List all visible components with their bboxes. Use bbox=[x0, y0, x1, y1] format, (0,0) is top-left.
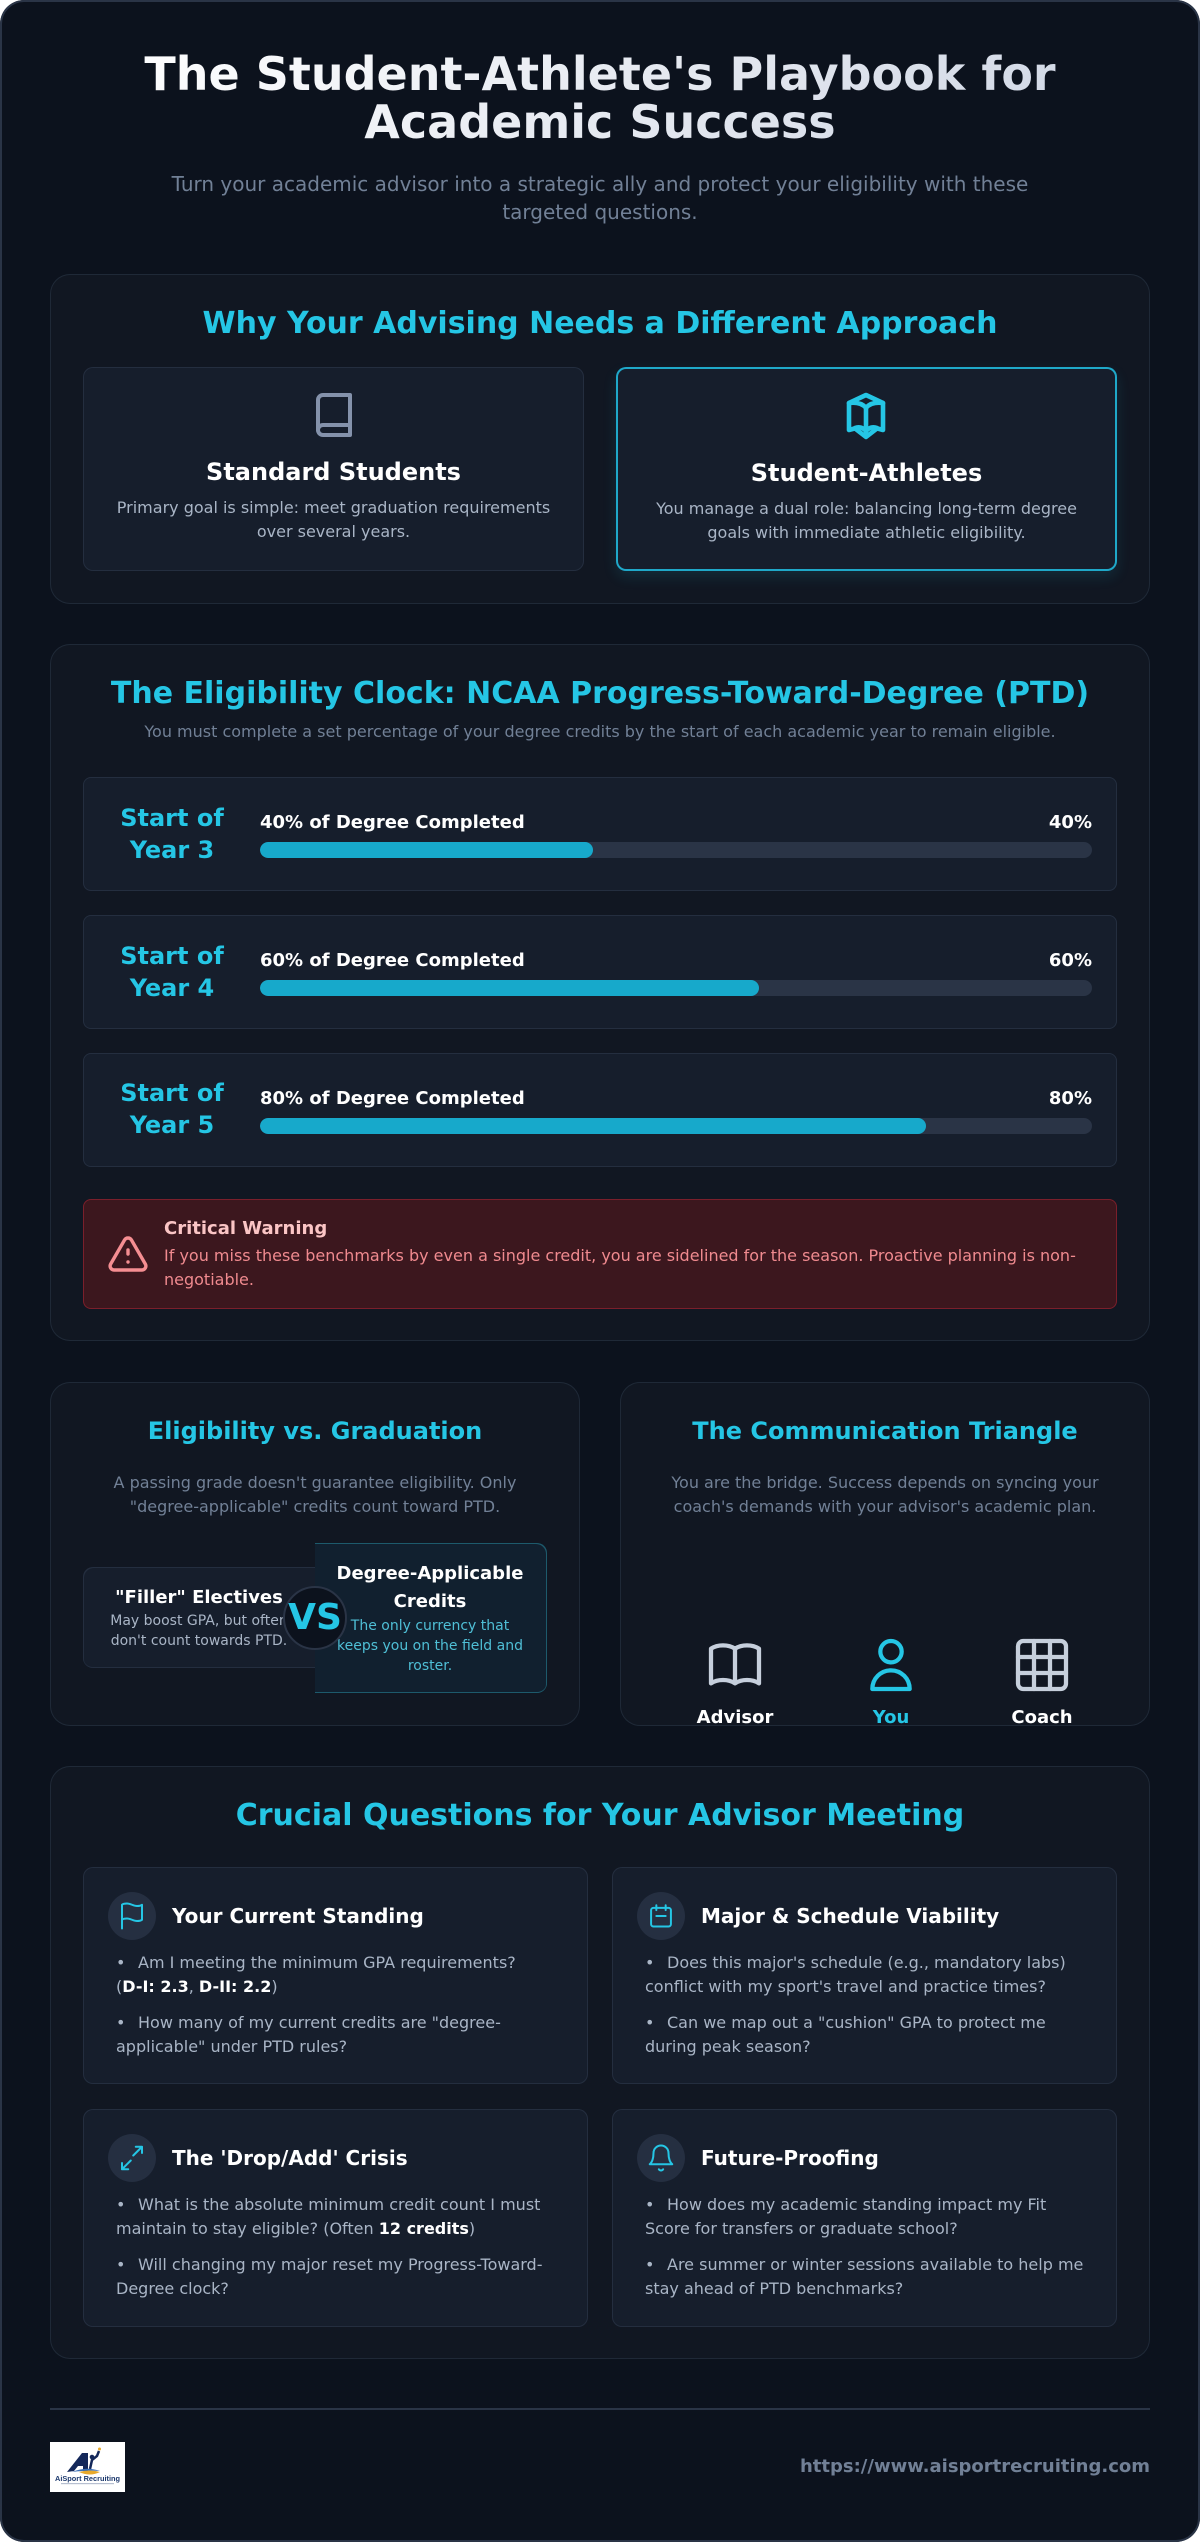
bar: 60 percent bbox=[260, 980, 1092, 996]
icon: book bbox=[316, 393, 352, 437]
text: student-athletes description: You manage a dual role: balancing long-term degree bbox=[656, 499, 1077, 518]
heading: degree-applicable credits: Credits bbox=[394, 1591, 466, 1612]
text: standard students description: Primary goal is simple: meet graduation requirements bbox=[117, 498, 550, 517]
question: summer or winter sessions bbox=[645, 2255, 1083, 2298]
icon: shield book bbox=[846, 392, 886, 440]
title: The Student-Athlete's Playbook for bbox=[144, 47, 1056, 101]
label: coach: Coach bbox=[1011, 1707, 1073, 1728]
text: critical warning body: If you miss these benchmarks by even a single credit, you are sidelined for the season. Proactive planning is non- bbox=[164, 1246, 1076, 1265]
text: standard students description bbox=[117, 498, 550, 541]
question: degree-applicable credits: How many of my current credits are "degree- bbox=[138, 2013, 501, 2032]
heading: eligibility clock: The Eligibility Clock: NCAA Progress-Toward-Degree (PTD) bbox=[111, 676, 1089, 711]
question: schedule conflict: Does this major's schedule (e.g., mandatory labs) bbox=[667, 1953, 1066, 1972]
label: start of year 5: Year 5 bbox=[130, 1111, 214, 1139]
label: 40 percent completed: 40% bbox=[1049, 812, 1092, 833]
icon: coach grid bbox=[1016, 1638, 1068, 1692]
text: degree-applicable description: The only currency that bbox=[351, 1618, 509, 1634]
label: start of year 3: Year 3 bbox=[130, 836, 214, 864]
label: start of year 4: Year 4 bbox=[130, 974, 214, 1002]
label: start of year 5 bbox=[120, 1079, 224, 1139]
icon: flag bbox=[108, 1892, 156, 1940]
heading: communication triangle: The Communication Triangle bbox=[692, 1417, 1078, 1445]
label: 80 percent completed bbox=[260, 1088, 1092, 1109]
label: 60 percent completed: 60% of Degree Completed bbox=[260, 950, 525, 971]
heading: the drop/add crisis: The 'Drop/Add' Crisis bbox=[172, 2146, 408, 2170]
label: 40 percent completed: 40% of Degree Completed bbox=[260, 812, 525, 833]
question: minimum credit count: • bbox=[116, 2195, 125, 2214]
label: 80 percent completed: 80% of Degree Completed bbox=[260, 1088, 525, 1109]
card: future-proofing bbox=[612, 2109, 1117, 2327]
question: degree-applicable credits: applicable" under PTD rules? bbox=[116, 2037, 347, 2056]
heading: student-athletes: Student-Athletes bbox=[751, 459, 982, 487]
text: student-athletes description: goals with immediate athletic eligibility. bbox=[707, 523, 1026, 542]
comparison box: degree-applicable credits bbox=[315, 1543, 547, 1693]
text: eligibility vs graduation intro bbox=[114, 1473, 516, 1516]
title bbox=[100, 50, 1100, 146]
panel: crucial questions bbox=[50, 1766, 1150, 2359]
panel: eligibility vs graduation bbox=[50, 1382, 580, 1726]
heading: future-proofing: Future-Proofing bbox=[701, 2146, 879, 2170]
label: start of year 5: Start of bbox=[120, 1079, 224, 1107]
text: communication triangle intro: You are the bridge. Success depends on syncing your bbox=[671, 1473, 1099, 1492]
question: fit score: • bbox=[645, 2195, 654, 2214]
text: communication triangle intro bbox=[671, 1473, 1099, 1516]
heading: degree-applicable credits bbox=[337, 1563, 523, 1612]
text: critical warning body: negotiable. bbox=[164, 1270, 254, 1289]
panel: the communication triangle bbox=[620, 1382, 1150, 1726]
text: degree-applicable description bbox=[337, 1618, 523, 1674]
question: gpa requirements bbox=[116, 1953, 516, 1996]
logo: aisport recruiting bbox=[50, 2442, 125, 2492]
question: cushion gpa bbox=[645, 2013, 1046, 2056]
question: degree-applicable credits: • bbox=[116, 2013, 125, 2032]
badge: vs: VS bbox=[288, 1597, 342, 1638]
question: minimum credit count: maintain to stay eligible? (Often 12 credits) bbox=[116, 2219, 475, 2238]
label: 80 percent completed: 80% bbox=[1049, 1088, 1092, 1109]
card: major and schedule viability bbox=[612, 1867, 1117, 2084]
heading: different approach: Why Your Advising Needs a Different Approach bbox=[203, 306, 997, 341]
question: changing major: Will changing my major reset my Progress-Toward- bbox=[138, 2255, 542, 2274]
progress row: year 4 bbox=[83, 915, 1117, 1029]
icon: you person bbox=[870, 1638, 912, 1692]
icon: advisor open book bbox=[708, 1643, 762, 1686]
progress row: year 5 bbox=[83, 1053, 1117, 1167]
text: filler electives description bbox=[110, 1613, 288, 1649]
heading: critical warning: Critical Warning bbox=[164, 1218, 327, 1239]
text: filler electives description: don't count towards PTD. bbox=[111, 1633, 287, 1649]
question: gpa requirements: • bbox=[116, 1953, 125, 1972]
text: degree-applicable description: keeps you on the field and bbox=[337, 1638, 523, 1654]
text: eligibility vs graduation intro: "degree-applicable" credits count toward PTD. bbox=[130, 1497, 500, 1516]
panel: why your advising needs a different approach bbox=[50, 274, 1150, 604]
text: degree-applicable description: roster. bbox=[408, 1658, 452, 1674]
label: 40 percent completed bbox=[260, 812, 1092, 833]
question: summer or winter sessions: • bbox=[645, 2255, 654, 2274]
panel: the eligibility clock bbox=[50, 644, 1150, 1341]
question: changing major: • bbox=[116, 2255, 125, 2274]
heading: crucial questions: Crucial Questions for Your Advisor Meeting bbox=[236, 1798, 964, 1833]
card: the drop/add crisis bbox=[83, 2109, 588, 2327]
subtitle bbox=[172, 172, 1028, 224]
label: start of year 4 bbox=[120, 942, 224, 1002]
bar: 40 percent bbox=[260, 842, 1092, 858]
question: cushion gpa: • bbox=[645, 2013, 654, 2032]
heading: your current standing: Your Current Standing bbox=[172, 1904, 424, 1928]
icon: bell bbox=[637, 2134, 685, 2182]
bar: 80 percent bbox=[260, 1118, 1092, 1134]
question: schedule conflict: conflict with my sport's travel and practice times? bbox=[645, 1977, 1046, 1996]
label: 60 percent completed: 60% bbox=[1049, 950, 1092, 971]
badge: vs bbox=[283, 1586, 347, 1650]
question: gpa requirements: Am I meeting the minimum GPA requirements? bbox=[138, 1953, 516, 1972]
text: critical warning body bbox=[164, 1246, 1076, 1289]
question: schedule conflict bbox=[645, 1953, 1066, 1996]
heading: degree-applicable credits: Degree-Applicable bbox=[337, 1563, 523, 1584]
question: summer or winter sessions: Are summer or winter sessions available to help me bbox=[667, 2255, 1083, 2274]
question: fit score: How does my academic standing impact my Fit bbox=[667, 2195, 1046, 2214]
label: you: You bbox=[873, 1707, 909, 1728]
question: minimum credit count bbox=[116, 2195, 540, 2238]
label: advisor: Advisor bbox=[697, 1707, 773, 1728]
icon: diagonal arrows bbox=[108, 2134, 156, 2182]
text: communication triangle intro: coach's demands with your advisor's academic plan. bbox=[674, 1497, 1096, 1516]
text: student-athletes description bbox=[656, 499, 1077, 542]
callout: critical warning bbox=[83, 1199, 1117, 1309]
text: eligibility vs graduation intro: A passing grade doesn't guarantee eligibility. Only bbox=[114, 1473, 516, 1492]
card: student-athletes bbox=[616, 367, 1117, 571]
progress row: year 3 bbox=[83, 777, 1117, 891]
comparison box: filler electives bbox=[83, 1567, 315, 1668]
question: gpa requirements: (D-I: 2.3, D-II: 2.2) bbox=[116, 1977, 278, 1996]
question: cushion gpa: during peak season? bbox=[645, 2037, 811, 2056]
question: changing major: Degree clock? bbox=[116, 2279, 229, 2298]
logo: aisport recruiting: AiSport Recruiting bbox=[55, 2476, 120, 2483]
question: degree-applicable credits bbox=[116, 2013, 501, 2056]
subtitle: Turn your academic advisor into a strategic ally and protect your eligibility with these bbox=[172, 172, 1028, 196]
question: cushion gpa: Can we map out a "cushion" GPA to protect me bbox=[667, 2013, 1046, 2032]
label: start of year 4: Start of bbox=[120, 942, 224, 970]
icon: calendar bbox=[637, 1892, 685, 1940]
question: changing major bbox=[116, 2255, 542, 2298]
text: standard students description: over several years. bbox=[257, 522, 410, 541]
label: 60 percent completed bbox=[260, 950, 1092, 971]
question: summer or winter sessions: stay ahead of PTD benchmarks? bbox=[645, 2279, 903, 2298]
icon: warning triangle bbox=[108, 1236, 148, 1272]
question: schedule conflict: • bbox=[645, 1953, 654, 1972]
label: start of year 3 bbox=[120, 804, 224, 864]
question: fit score bbox=[645, 2195, 1046, 2238]
label: start of year 3: Start of bbox=[120, 804, 224, 832]
text: filler electives description: May boost GPA, but often bbox=[110, 1613, 288, 1629]
question: fit score: Score for transfers or graduate school? bbox=[645, 2219, 958, 2238]
heading: eligibility vs graduation: Eligibility vs. Graduation bbox=[148, 1417, 482, 1445]
footer url: https://www.aisportrecruiting.com bbox=[800, 2456, 1150, 2477]
subtitle: targeted questions. bbox=[502, 200, 698, 224]
card: standard students bbox=[83, 367, 584, 571]
title: Academic Success bbox=[364, 95, 836, 149]
heading: filler electives: "Filler" Electives bbox=[115, 1587, 283, 1608]
heading: standard students: Standard Students bbox=[206, 458, 461, 486]
card: your current standing bbox=[83, 1867, 588, 2084]
heading: major and schedule viability: Major & Schedule Viability bbox=[701, 1904, 999, 1928]
text: eligibility clock intro: You must complete a set percentage of your degree credits by the start of each academic year to remain eligible. bbox=[144, 722, 1056, 741]
question: minimum credit count: What is the absolute minimum credit count I must bbox=[138, 2195, 540, 2214]
